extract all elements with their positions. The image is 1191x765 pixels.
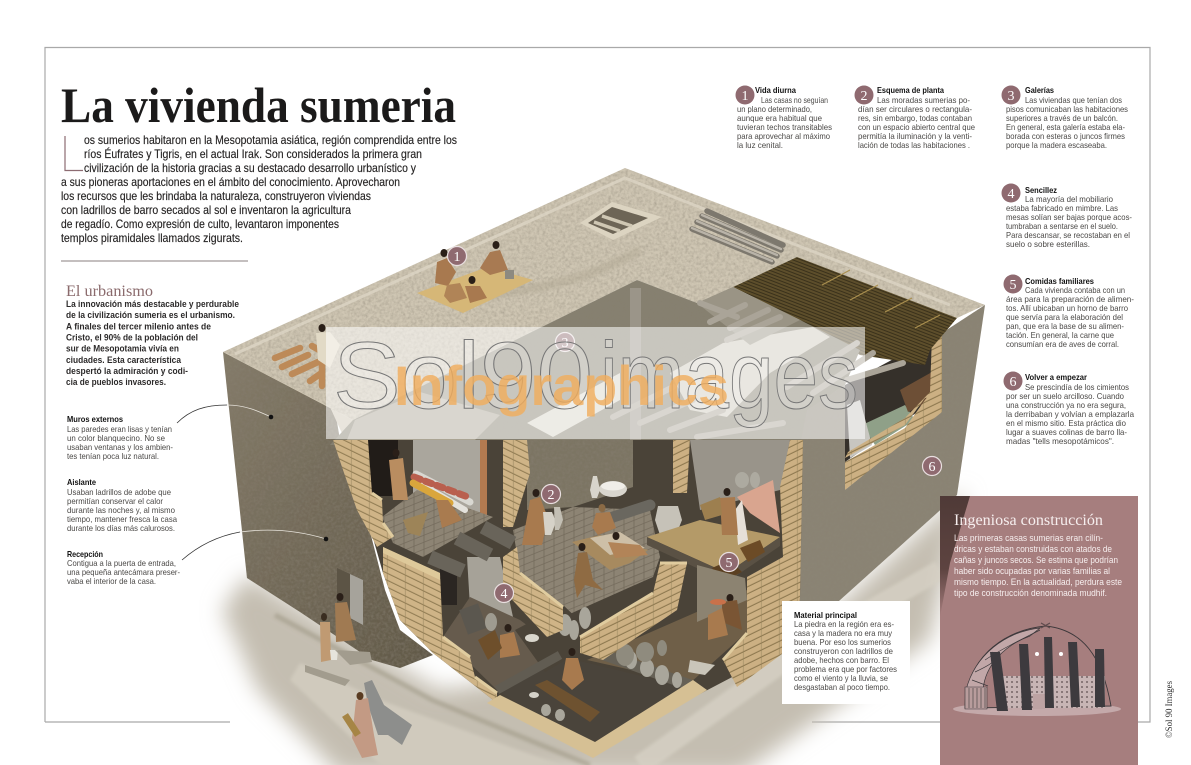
note: Recepción: vaba el interior de la casa. xyxy=(67,577,156,586)
central courtyard floor xyxy=(513,476,682,617)
right outer wall xyxy=(790,305,985,645)
panel: Material principal: La piedra en la región era es- xyxy=(794,620,894,629)
lighter brick step tops xyxy=(372,493,747,693)
leader line: Recepción xyxy=(182,530,328,560)
intro text block: con ladrillos de barro secados al sol e inventaron la agricultura xyxy=(61,204,351,217)
note: Muros externos: Las paredes eran lisas y tenían xyxy=(67,425,172,434)
jars on shelf xyxy=(735,472,760,488)
note: Muros externos: usaban ventanas y los ambien- xyxy=(67,443,173,452)
intro text block: ríos Éufrates y Tigris, en el actual Irak. Son considerados la primera gran xyxy=(84,148,422,161)
watermark band: Infographics xyxy=(394,354,729,417)
item 6: Volver a empezar: la derribaban y volvían a emplazarla xyxy=(1006,410,1134,419)
body text: haber sido ocupadas por varias familias al xyxy=(954,566,1110,576)
item 4: Sencillez: mesas solían ser bajas porque acos- xyxy=(1006,213,1132,222)
entrance door xyxy=(337,568,363,625)
watermark band: Sol90 xyxy=(333,323,593,429)
note: Aislante: Usaban ladrillos de adobe que xyxy=(67,488,171,497)
body text: Las primeras casas sumerias eran cilín- xyxy=(954,533,1103,543)
callout: number 4 on image xyxy=(494,584,514,602)
jars and storage xyxy=(529,607,682,721)
lower rooms xyxy=(430,527,747,750)
panel: Material principal: adobe, hechos con barro. El xyxy=(794,656,889,665)
callout: number 5 on image xyxy=(720,552,738,572)
copyright credit: ©Sol 90 Images xyxy=(1164,681,1175,738)
left outer wall xyxy=(223,352,433,668)
heading: El urbanismo xyxy=(66,283,153,300)
number badge 4: 4 xyxy=(1008,187,1014,202)
panel: Material principal: Material principal xyxy=(794,611,857,620)
item 4: Sencillez: suelo o sobre esterillas. xyxy=(1006,240,1090,249)
note: Aislante: tiempo, mantener fresca la casa xyxy=(67,515,177,524)
item 6: Volver a empezar: una construcción ya no era segura, xyxy=(1006,401,1126,410)
item 1: Vida diurna: la luz cenital. xyxy=(737,141,783,150)
section: El urbanismo xyxy=(66,283,239,388)
left upper room xyxy=(368,440,493,557)
item 2: Esquema de planta: lación de todas las habitaciones . xyxy=(858,141,970,150)
item 2: Esquema de planta: res, sin embargo, todas contaban xyxy=(858,114,972,123)
number badge 5: 5 xyxy=(1010,278,1016,293)
body text: tipo de construcción denominada mudhif. xyxy=(954,588,1107,598)
item 5: Comidas familiares: tos. Allí ubicaban un horno de barro xyxy=(1006,304,1128,313)
item 3: Galerías xyxy=(1002,86,1128,150)
leader line: Muros externos xyxy=(177,405,273,423)
item 1: Vida diurna: Vida diurna xyxy=(755,86,796,95)
note: Recepción: Contigua a la puerta de entrada, xyxy=(67,559,176,568)
item 5: Comidas familiares: tación. En general, la carne que xyxy=(1006,331,1114,340)
note: Aislante: durante los días más calurosos. xyxy=(67,524,175,533)
entrance steps xyxy=(305,650,372,686)
panel: Material principal: desgastaban al poco tiempo. xyxy=(794,683,890,692)
note: Recepción xyxy=(67,550,180,586)
note: Muros externos: tes tenían poca luz natural. xyxy=(67,452,159,461)
item 5: Comidas familiares: que servía para la elaboración del xyxy=(1006,313,1123,322)
number badge 2: 2 xyxy=(860,89,868,104)
right room wall xyxy=(690,440,790,510)
item 4: Sencillez: Sencillez xyxy=(1025,186,1057,195)
intro text block: a sus pioneras aportaciones en el ámbito del conocimiento. Aprovecharon xyxy=(61,176,400,189)
intro text block xyxy=(61,134,457,245)
person carrying bricks xyxy=(316,324,340,368)
note: Aislante: permitían conservar el calor xyxy=(67,497,163,506)
thatched reed roof xyxy=(733,257,957,365)
item 1: Vida diurna: Las casas no seguían xyxy=(761,96,828,105)
panel: Ingeniosa construcción xyxy=(940,496,1138,765)
heading: Ingeniosa construcción xyxy=(954,512,1103,529)
item 4: Sencillez: Para descansar, se recostaban en el xyxy=(1006,231,1130,240)
item 6: Volver a empezar: Volver a empezar xyxy=(1025,373,1088,382)
item 1: Vida diurna: tuvieran techos transitables xyxy=(737,123,832,132)
callout: number 6 on image xyxy=(922,456,942,476)
seated people on roof xyxy=(435,241,514,303)
note: Aislante: durante las noches y, al mismo xyxy=(67,506,175,515)
raised platform with bed xyxy=(647,472,780,582)
callout: number 3 on image: 3 xyxy=(562,336,568,351)
lead paragraph: despertó la admiración y codi- xyxy=(66,366,188,377)
intro text block: los recursos que les brindaba la naturaleza, construyeron viviendas xyxy=(61,190,371,203)
item 1: Vida diurna: para aprovechar al máximo xyxy=(737,132,830,141)
people in lower rooms xyxy=(459,594,742,690)
body text: dricas y estaban construidas con atados de xyxy=(954,544,1112,554)
note: Muros externos xyxy=(67,415,173,461)
item 4: Sencillez: estaba fabricado en mimbre. Las xyxy=(1006,204,1118,213)
item 1: Vida diurna: aunque era habitual que xyxy=(737,114,822,123)
item 3: Galerías: porque la madera escaseaba. xyxy=(1006,141,1107,150)
note: Muros externos: Muros externos xyxy=(67,415,123,424)
illustration: sumerian house cutaway xyxy=(222,168,985,765)
donkey and rider xyxy=(345,680,412,758)
lead paragraph: de la civilización sumeria es el urbanismo. xyxy=(66,310,235,321)
brick walls xyxy=(333,440,803,758)
note: Recepción: Recepción xyxy=(67,550,103,559)
note: Muros externos: un color blanquecino. No se xyxy=(67,434,165,443)
big jar xyxy=(655,506,682,535)
intro text block: de regadío. Como expresión de culto, levantaron imponentes xyxy=(61,218,339,231)
item 6: Volver a empezar: madas "tells mesopotámicos". xyxy=(1006,437,1114,446)
panel: Material principal: construyeron con ladrillos de xyxy=(794,647,893,656)
lead paragraph: Cristo, el 90% de la población del xyxy=(66,332,198,344)
panel: Material principal: problema era que por factores xyxy=(794,665,897,674)
item 1: Vida diurna xyxy=(736,86,832,150)
body text xyxy=(954,533,1122,598)
stacked logs on roof xyxy=(692,211,783,262)
watermark band: images xyxy=(600,323,858,429)
intro text block: os sumerios habitaron en la Mesopotamia asiática, región comprendida entre los xyxy=(84,134,457,147)
note: Aislante xyxy=(67,478,177,533)
lower interior base xyxy=(345,440,803,750)
item 2: Esquema de planta: Las moradas sumerias po- xyxy=(877,96,970,105)
callout: number 2 on image: 2 xyxy=(548,488,554,503)
title: La vivienda sumeria xyxy=(61,77,456,133)
item 4: Sencillez: La mayoría del mobiliario xyxy=(1025,195,1113,204)
panel: Material principal: buena. Por eso los sumerios xyxy=(794,638,891,647)
callout: number 4 on image: 4 xyxy=(500,587,508,602)
item 3: Galerías: borada con esteras o juncos firmes xyxy=(1006,132,1125,141)
callout: number 3 on image xyxy=(556,332,574,352)
people in courtyard xyxy=(522,489,648,598)
item 4: Sencillez: tumbraban a sentarse en el suelo. xyxy=(1006,222,1118,231)
upper interior and gallery xyxy=(330,280,903,498)
intro text block: civilización de la historia gracias a su destacado desarrollo urbanístico y xyxy=(84,162,416,175)
central room back wall xyxy=(527,440,633,510)
callout: number 2 on image xyxy=(542,484,560,504)
watermark band xyxy=(326,323,865,439)
person at bed xyxy=(720,488,738,535)
rug on roof xyxy=(417,267,533,313)
item 2: Esquema de planta xyxy=(854,86,975,150)
bowl and vase xyxy=(590,476,627,498)
roof hatch xyxy=(580,202,662,240)
item 6: Volver a empezar: Se prescindía de los cimientos xyxy=(1025,383,1129,392)
item 3: Galerías: Galerías xyxy=(1025,86,1054,95)
drop cap L xyxy=(65,136,83,170)
item 6: Volver a empezar: lugar a suaves colinas de barro lla- xyxy=(1006,428,1127,437)
item 3: Galerías: En general, esta galería estaba ela- xyxy=(1006,123,1125,132)
item 3: Galerías: superiores a través de un balcón. xyxy=(1006,114,1118,123)
number badge 6: 6 xyxy=(1010,375,1016,390)
item 5: Comidas familiares: pan, que era la base de su alimen- xyxy=(1006,322,1124,331)
pink bed cover xyxy=(737,480,780,533)
lead paragraph: cia de pueblos invasores. xyxy=(66,377,166,388)
panel: Material principal: como el viento y la lluvia, se xyxy=(794,674,888,683)
window room in right wall xyxy=(845,330,942,490)
rolled textile rugs xyxy=(413,474,470,510)
item 5: Comidas familiares: Cada vivienda contaba con un xyxy=(1025,286,1125,295)
intro text block: templos piramidales llamados zigurats. xyxy=(61,232,243,245)
body text: cañas y juncos secos. Se estima que podrían xyxy=(954,555,1118,565)
wooden table with food xyxy=(535,680,600,722)
note: Recepción: una pequeña antecámara preser- xyxy=(67,568,180,577)
item 6: Volver a empezar: por ser un suelo arcilloso. Cuando xyxy=(1006,392,1124,401)
item 3: Galerías: Las viviendas que tenían dos xyxy=(1025,96,1122,105)
people at the entrance xyxy=(320,593,356,662)
item 2: Esquema de planta: Esquema de planta xyxy=(877,86,944,95)
item 5: Comidas familiares: consumían era de aves de corral. xyxy=(1006,340,1119,349)
lead paragraph xyxy=(66,299,239,388)
illustration: mudhif reed house xyxy=(953,623,1121,716)
callout: number 1 on image: 1 xyxy=(454,250,460,265)
item 4: Sencillez xyxy=(1002,184,1132,249)
item 5: Comidas familiares: Comidas familiares xyxy=(1025,277,1094,286)
roof terrace xyxy=(223,168,985,440)
ground and street xyxy=(222,490,965,765)
number badge 1: 1 xyxy=(742,89,748,104)
callout: number 6 on image: 6 xyxy=(928,460,936,475)
body text: mismo tiempo. En la actualidad, perdura este xyxy=(954,577,1122,587)
callout: number 5 on image: 5 xyxy=(726,556,732,571)
lead paragraph: ciudades. Esta característica xyxy=(66,355,182,366)
bricks stacked on roof xyxy=(275,346,330,386)
item 2: Esquema de planta: dían ser circulares o rectangula- xyxy=(858,105,972,114)
item 5: Comidas familiares xyxy=(1004,274,1134,349)
lead paragraph: sur de Mesopotamia vivía en xyxy=(66,344,179,354)
item 6: Volver a empezar xyxy=(1004,372,1134,446)
item 2: Esquema de planta: permitía la iluminación y la venti- xyxy=(858,132,972,141)
item 3: Galerías: pisos comunicaban las habitaciones xyxy=(1006,105,1128,114)
panel: Material principal: casa y la madera no era muy xyxy=(794,629,893,638)
lead paragraph: La innovación más destacable y perdurable xyxy=(66,299,239,310)
item 1: Vida diurna: un plano determinado, xyxy=(737,105,812,114)
panel: Material principal xyxy=(782,601,910,704)
person standing at the rugs xyxy=(389,449,462,528)
wooden beams xyxy=(613,303,903,437)
lead paragraph: A finales del tercer milenio antes de xyxy=(66,322,211,332)
number badge 3: 3 xyxy=(1008,89,1014,104)
callout: number 1 on image xyxy=(448,246,466,266)
item 5: Comidas familiares: área para la preparación de alimen- xyxy=(1006,295,1134,304)
note: Aislante: Aislante xyxy=(67,478,96,487)
item 6: Volver a empezar: en el mismo sitio. Esta práctica dio xyxy=(1006,419,1126,428)
item 2: Esquema de planta: con un espacio abierto central que xyxy=(858,123,975,132)
